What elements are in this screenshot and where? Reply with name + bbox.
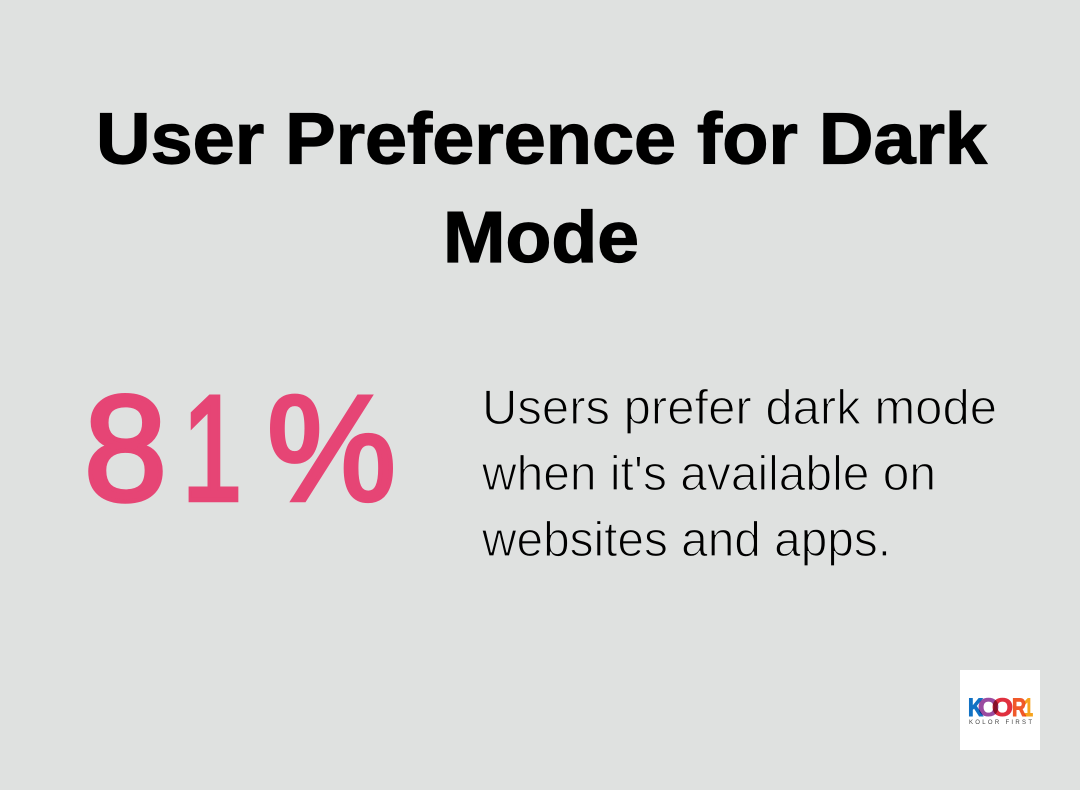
statistic: 81%: 8: [84, 364, 167, 532]
logo wordmark: 1: [1024, 694, 1033, 722]
description text: Users prefer dark mode: [482, 381, 997, 435]
title: Mode: [443, 198, 639, 278]
logo wordmark: [968, 694, 1033, 722]
logo tagline: KOLOR FIRST: [969, 720, 1032, 726]
statistic: 81%: %: [267, 364, 396, 532]
description text: [481, 381, 997, 567]
statistic: 81%: [84, 364, 396, 532]
description text: when it's available on: [481, 447, 936, 501]
logo wordmark: R: [1012, 694, 1026, 722]
statistic: 81%: 1: [182, 364, 242, 532]
logo: Koori: [960, 670, 1040, 750]
logo wordmark: O: [978, 694, 999, 722]
title: [96, 100, 988, 278]
logo wordmark: O: [992, 694, 1013, 722]
title: User Preference for Dark: [96, 100, 988, 180]
description text: websites and apps.: [481, 513, 891, 567]
logo wordmark: K: [968, 694, 983, 722]
